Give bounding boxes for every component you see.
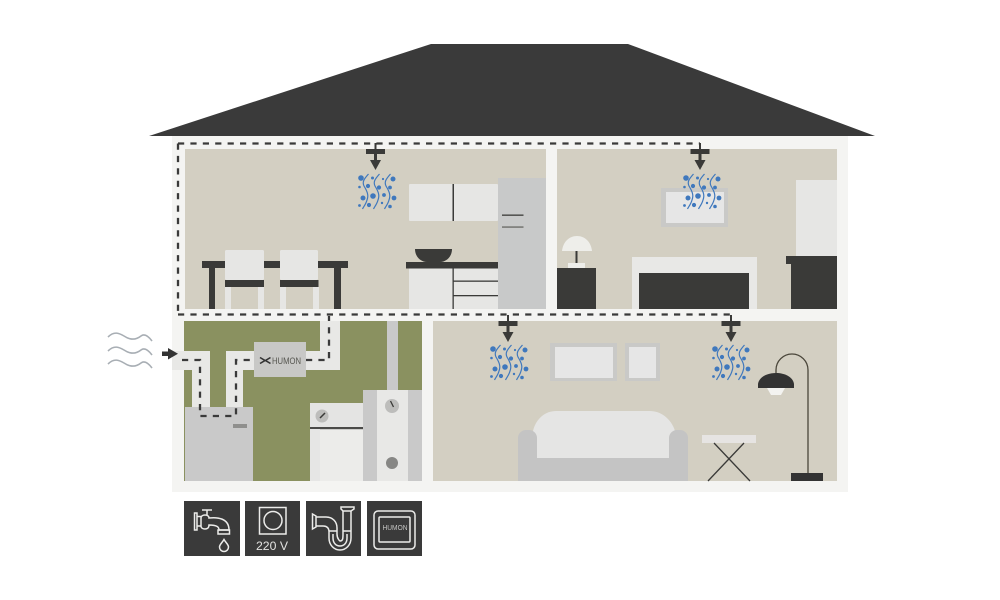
icon: water tap: [184, 501, 240, 556]
house walls: [172, 136, 848, 492]
refrigerator: [498, 178, 546, 309]
side table: [702, 435, 756, 481]
dining chair right: [280, 250, 319, 309]
washing machine: [310, 403, 363, 481]
countertop: [406, 262, 498, 268]
icon: clean air living room left: [490, 345, 528, 380]
air ducts: [172, 321, 340, 407]
icon: 220 V power socket: [245, 501, 300, 556]
panel: living room: [433, 321, 837, 481]
sofa: [518, 411, 688, 481]
floor lamp: [758, 354, 823, 481]
bedside lamp: [562, 236, 592, 268]
upper kitchen cabinets: [409, 184, 498, 221]
icon: HUMON control panel: [367, 501, 422, 556]
roof: [149, 44, 875, 136]
icon: supply vent living room left: [498, 315, 518, 342]
dining chair left: [225, 250, 264, 309]
icon: drain pipe: [306, 501, 361, 556]
icon: 220 V power socket: 220 V: [256, 539, 288, 553]
lower kitchen cabinets: [409, 268, 498, 309]
bowl: [415, 249, 452, 262]
panel: bedroom: [557, 149, 837, 309]
icon: supply vent kitchen: [366, 143, 385, 170]
HUMON ventilation unit: [254, 342, 306, 377]
water pipe: [387, 321, 398, 390]
wardrobe: [786, 180, 837, 309]
wall picture small: [625, 343, 660, 381]
boiler: [185, 407, 253, 481]
panel: utility room: [172, 321, 422, 481]
water heater: [363, 390, 422, 481]
icon: supply vent bedroom: [690, 143, 710, 170]
arrow: air intake: [162, 348, 178, 360]
ventilation duct network: [178, 144, 731, 416]
wall picture large: [550, 343, 617, 381]
icon: clean air living room right: [712, 345, 750, 380]
icon: clean air kitchen: [358, 174, 396, 209]
nightstand: [557, 268, 596, 309]
icon: outside air waves: [108, 333, 152, 368]
icon: HUMON control panel: HUMON: [382, 525, 408, 532]
wall picture: [661, 188, 728, 227]
bed: [632, 257, 757, 309]
dining table: [202, 261, 348, 309]
panel: kitchen and dining room: [185, 149, 546, 309]
icon: clean air bedroom: [683, 174, 721, 209]
icon: supply vent living room right: [722, 315, 740, 342]
HUMON ventilation unit: HUMON: [272, 356, 301, 366]
